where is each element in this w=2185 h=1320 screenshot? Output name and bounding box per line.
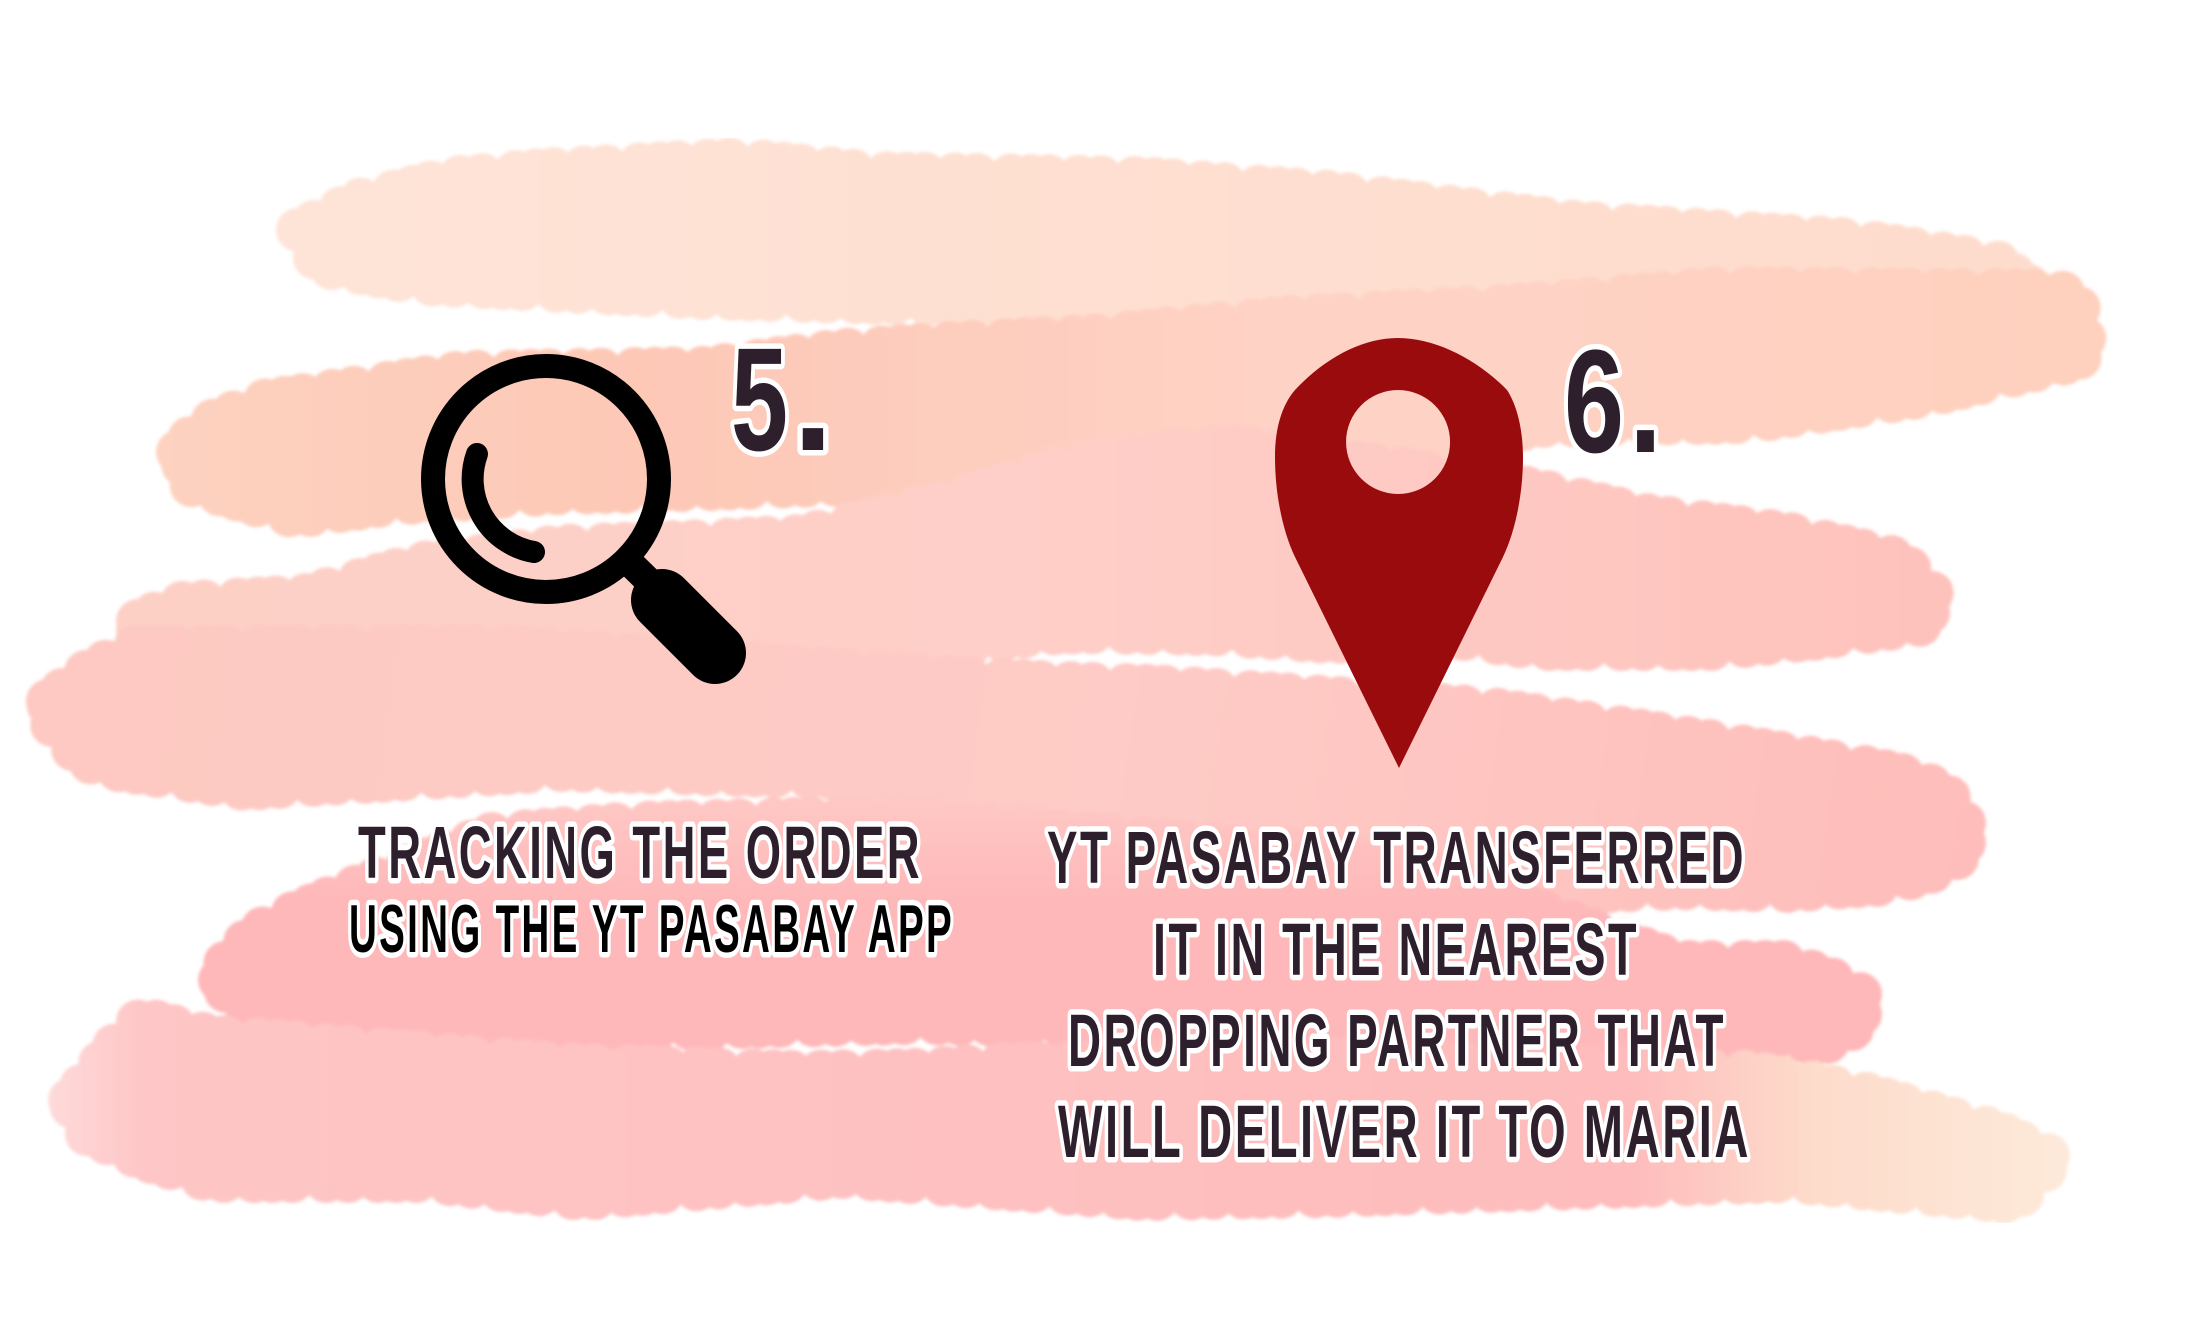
text: using the YT Pasabay app: USING THE YT PASABAY APP xyxy=(349,891,954,967)
text: delivery description: DROPPING PARTNER THAT xyxy=(1068,999,1726,1082)
step 5 group xyxy=(349,318,954,967)
step number 5: . xyxy=(793,318,833,482)
brush stroke: third band xyxy=(138,445,1932,720)
icon: map pin xyxy=(1275,338,1523,768)
brush stroke: fifth band xyxy=(220,816,1860,1042)
watercolor brush strokes background xyxy=(48,159,2087,1202)
brush stroke: top band xyxy=(298,159,2034,400)
text: delivery description: WILL DELIVER IT TO MARIA xyxy=(1058,1090,1751,1173)
brush stroke: fourth band xyxy=(48,646,1964,900)
text: tracking the order: TRACKING THE ORDER xyxy=(358,811,922,894)
icon: magnifying glass xyxy=(433,366,715,653)
step number 6: . xyxy=(1629,320,1662,484)
text: delivery description: IT IN THE NEAREST xyxy=(1153,908,1639,991)
brush stroke: bottom band xyxy=(70,1018,2054,1202)
step number 5: 5 xyxy=(731,318,788,482)
brush stroke: second band xyxy=(178,288,2087,517)
step number 6: 6 xyxy=(1564,320,1624,484)
text: delivery description: YT PASABAY TRANSFERRED xyxy=(1047,816,1746,899)
step 6 group xyxy=(1047,320,1751,1173)
text: delivery description xyxy=(1047,816,1751,1173)
